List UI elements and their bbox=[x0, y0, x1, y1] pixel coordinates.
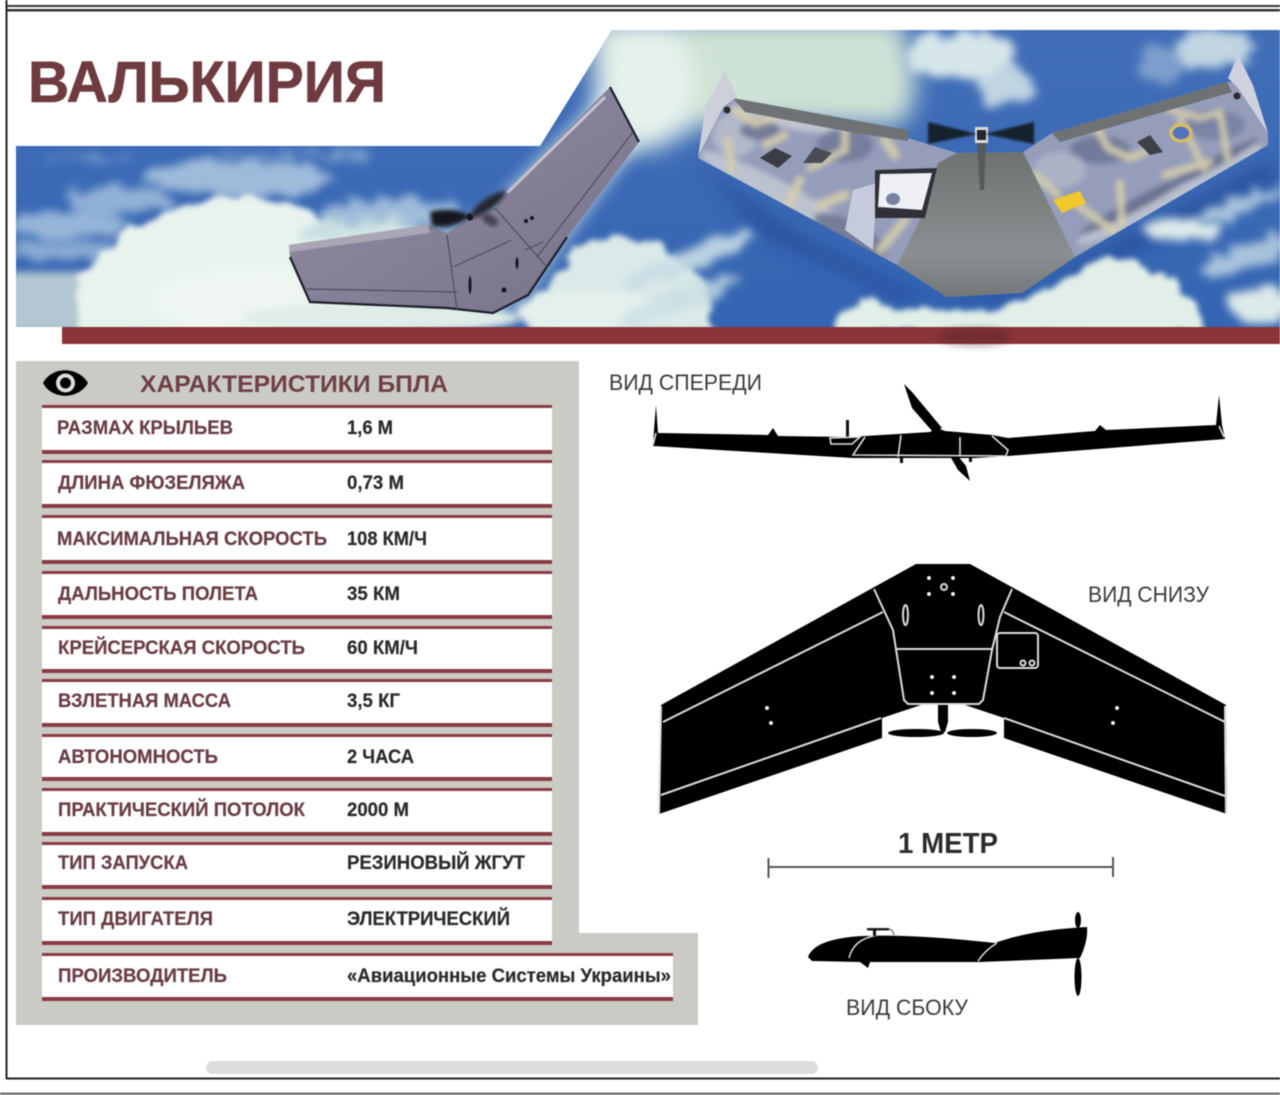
row: engine type: ТИП ДВИГАТЕЛЯ bbox=[58, 909, 213, 930]
row: wingspan bbox=[42, 405, 552, 454]
center section bbox=[897, 152, 1075, 297]
lower left haze bbox=[10, 272, 90, 332]
row: cruise speed: 60 КМ/Ч bbox=[347, 638, 418, 659]
large pale upper cloud bbox=[590, 20, 915, 150]
row: cruise speed bbox=[42, 626, 552, 673]
row: endurance bbox=[42, 734, 552, 781]
row: manufacturer: «Авиационные Системы Украины» bbox=[347, 966, 671, 987]
row: launch type: РЕЗИНОВЫЙ ЖГУТ bbox=[347, 852, 525, 874]
drawing: side view silhouette bbox=[808, 912, 1087, 996]
title: ВАЛЬКИРИЯ bbox=[28, 50, 386, 115]
drawing: bottom view silhouette bbox=[659, 564, 1227, 814]
row: fuselage length bbox=[42, 460, 552, 508]
scrollbar bbox=[206, 1061, 818, 1074]
winglets bbox=[698, 70, 737, 157]
left drone bbox=[289, 87, 639, 313]
row: takeoff mass: ВЗЛЕТНАЯ МАССА bbox=[58, 691, 231, 712]
row: wingspan: РАЗМАХ КРЫЛЬЕВ bbox=[57, 418, 233, 439]
panel heading: ХАРАКТЕРИСТИКИ БПЛА bbox=[140, 371, 448, 398]
distant wisps left bbox=[0, 152, 460, 259]
row: fuselage length: 0,73 М bbox=[347, 473, 404, 494]
row: service ceiling: ПРАКТИЧЕСКИЙ ПОТОЛОК bbox=[58, 799, 305, 821]
row: launch type: ТИП ЗАПУСКА bbox=[58, 853, 188, 874]
row: wingspan: 1,6 М bbox=[347, 418, 393, 439]
lower clouds bbox=[830, 259, 1210, 335]
row: flight range: 35 КМ bbox=[347, 584, 400, 605]
hatches and markings bbox=[760, 148, 792, 168]
row: flight range bbox=[42, 571, 552, 619]
big cumulus bbox=[74, 190, 352, 328]
row: takeoff mass: 3,5 КГ bbox=[347, 691, 400, 712]
propeller and nacelle bbox=[975, 127, 988, 143]
camouflage left wing bbox=[694, 98, 908, 266]
sky with clouds bbox=[0, 20, 1280, 335]
row: max speed: 108 КМ/Ч bbox=[347, 529, 427, 550]
row: endurance: АВТОНОМНОСТЬ bbox=[58, 747, 218, 768]
cloud right of small drone bbox=[530, 239, 720, 335]
label: front view: ВИД СПЕРЕДИ bbox=[609, 370, 762, 395]
row: service ceiling bbox=[42, 788, 552, 836]
row: manufacturer bbox=[42, 953, 673, 1001]
icon: eye bbox=[43, 370, 88, 396]
row: cruise speed: КРЕЙСЕРСКАЯ СКОРОСТЬ bbox=[58, 637, 305, 659]
row: max speed bbox=[42, 515, 552, 564]
row: manufacturer: ПРОИЗВОДИТЕЛЬ bbox=[58, 966, 227, 987]
shadow band under big drone wings bbox=[700, 160, 1280, 300]
red band under banner bbox=[62, 327, 1280, 346]
scale bar bbox=[768, 857, 1114, 878]
row: flight range: ДАЛЬНОСТЬ ПОЛЕТА bbox=[58, 584, 258, 605]
panel: UAV characteristics bbox=[16, 361, 698, 1025]
row: max speed: МАКСИМАЛЬНАЯ СКОРОСТЬ bbox=[57, 529, 327, 550]
banner: sky photo with drones bbox=[0, 20, 1280, 335]
row: engine type: ЭЛЕКТРИЧЕСКИЙ bbox=[347, 908, 510, 930]
label: bottom view: ВИД СНИЗУ bbox=[1088, 582, 1210, 607]
camouflage right wing bbox=[1034, 82, 1268, 255]
row: endurance: 2 ЧАСА bbox=[347, 747, 414, 768]
label: side view: ВИД СБОКУ bbox=[846, 995, 969, 1020]
row: takeoff mass bbox=[42, 679, 552, 727]
row: launch type bbox=[42, 842, 552, 889]
row: fuselage length: ДЛИНА ФЮЗЕЛЯЖА bbox=[58, 473, 245, 494]
wisps lower left of big drone bbox=[615, 223, 761, 333]
right drone bbox=[694, 55, 1268, 297]
row: engine type bbox=[42, 897, 552, 945]
drawing: front view silhouette bbox=[653, 384, 1225, 481]
row: service ceiling: 2000 М bbox=[347, 800, 409, 821]
scale label: 1 МЕТР bbox=[898, 828, 998, 860]
feathery clouds upper bbox=[905, 28, 1255, 107]
